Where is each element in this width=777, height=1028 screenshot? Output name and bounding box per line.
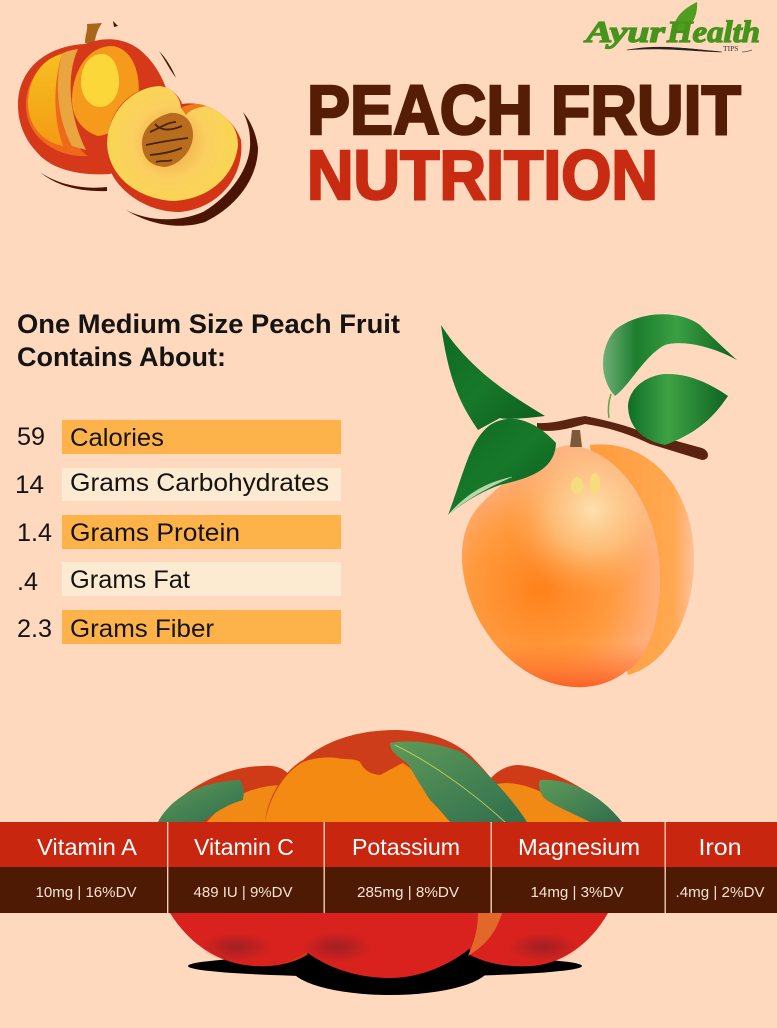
- vitamin and mineral table: .4mg | 2%DV: [676, 884, 764, 901]
- logo: AyurHealth Tips: TIPS: [723, 44, 738, 53]
- subheading: [17, 309, 400, 372]
- nutrient list: 2.3: [17, 615, 52, 643]
- nutrient list: 1.4: [17, 519, 52, 547]
- nutrient list: .4: [17, 568, 38, 596]
- illustration: whole peach with leaves: [441, 314, 737, 687]
- vitamin and mineral table: Magnesium: [518, 834, 640, 860]
- vitamin and mineral table: 489 IU | 9%DV: [194, 884, 292, 901]
- nutrient list: Calories: [70, 424, 164, 452]
- logo: AyurHealth Tips: Health: [666, 14, 760, 49]
- centre peach: [265, 730, 527, 978]
- nutrient list: Grams Carbohydrates: [70, 469, 329, 497]
- illustration: three peaches: [158, 730, 622, 995]
- illustration: peach with cut half: [18, 21, 258, 226]
- title: [307, 71, 741, 214]
- logo: AyurHealth Tips: Ayur: [583, 14, 666, 49]
- nutrient list: [15, 420, 341, 644]
- nutrient list: Grams Fat: [70, 566, 190, 594]
- vitamin and mineral table: 10mg | 16%DV: [36, 884, 136, 901]
- vitamin and mineral table: Iron: [698, 834, 742, 860]
- title: NUTRITION: [307, 136, 658, 214]
- nutrient list: Grams Protein: [70, 519, 240, 547]
- subheading: One Medium Size Peach Fruit: [17, 309, 400, 339]
- vitamin and mineral table: Vitamin A: [37, 834, 138, 860]
- title: PEACH FRUIT: [307, 71, 741, 149]
- vitamin and mineral table: 14mg | 3%DV: [530, 884, 624, 901]
- vitamin and mineral table: 285mg | 8%DV: [357, 884, 459, 901]
- vitamin and mineral table: Potassium: [352, 834, 460, 860]
- nutrient list: Grams Fiber: [70, 615, 214, 643]
- left peach: [158, 766, 310, 966]
- nutrient list: 59: [17, 423, 45, 451]
- vitamin and mineral table: Vitamin C: [194, 834, 294, 860]
- vitamin and mineral table: [0, 822, 777, 913]
- right peach: [470, 765, 622, 966]
- subheading: Contains About:: [17, 342, 226, 372]
- logo: AyurHealth Tips: [583, 2, 760, 53]
- nutrient list: 14: [15, 471, 44, 499]
